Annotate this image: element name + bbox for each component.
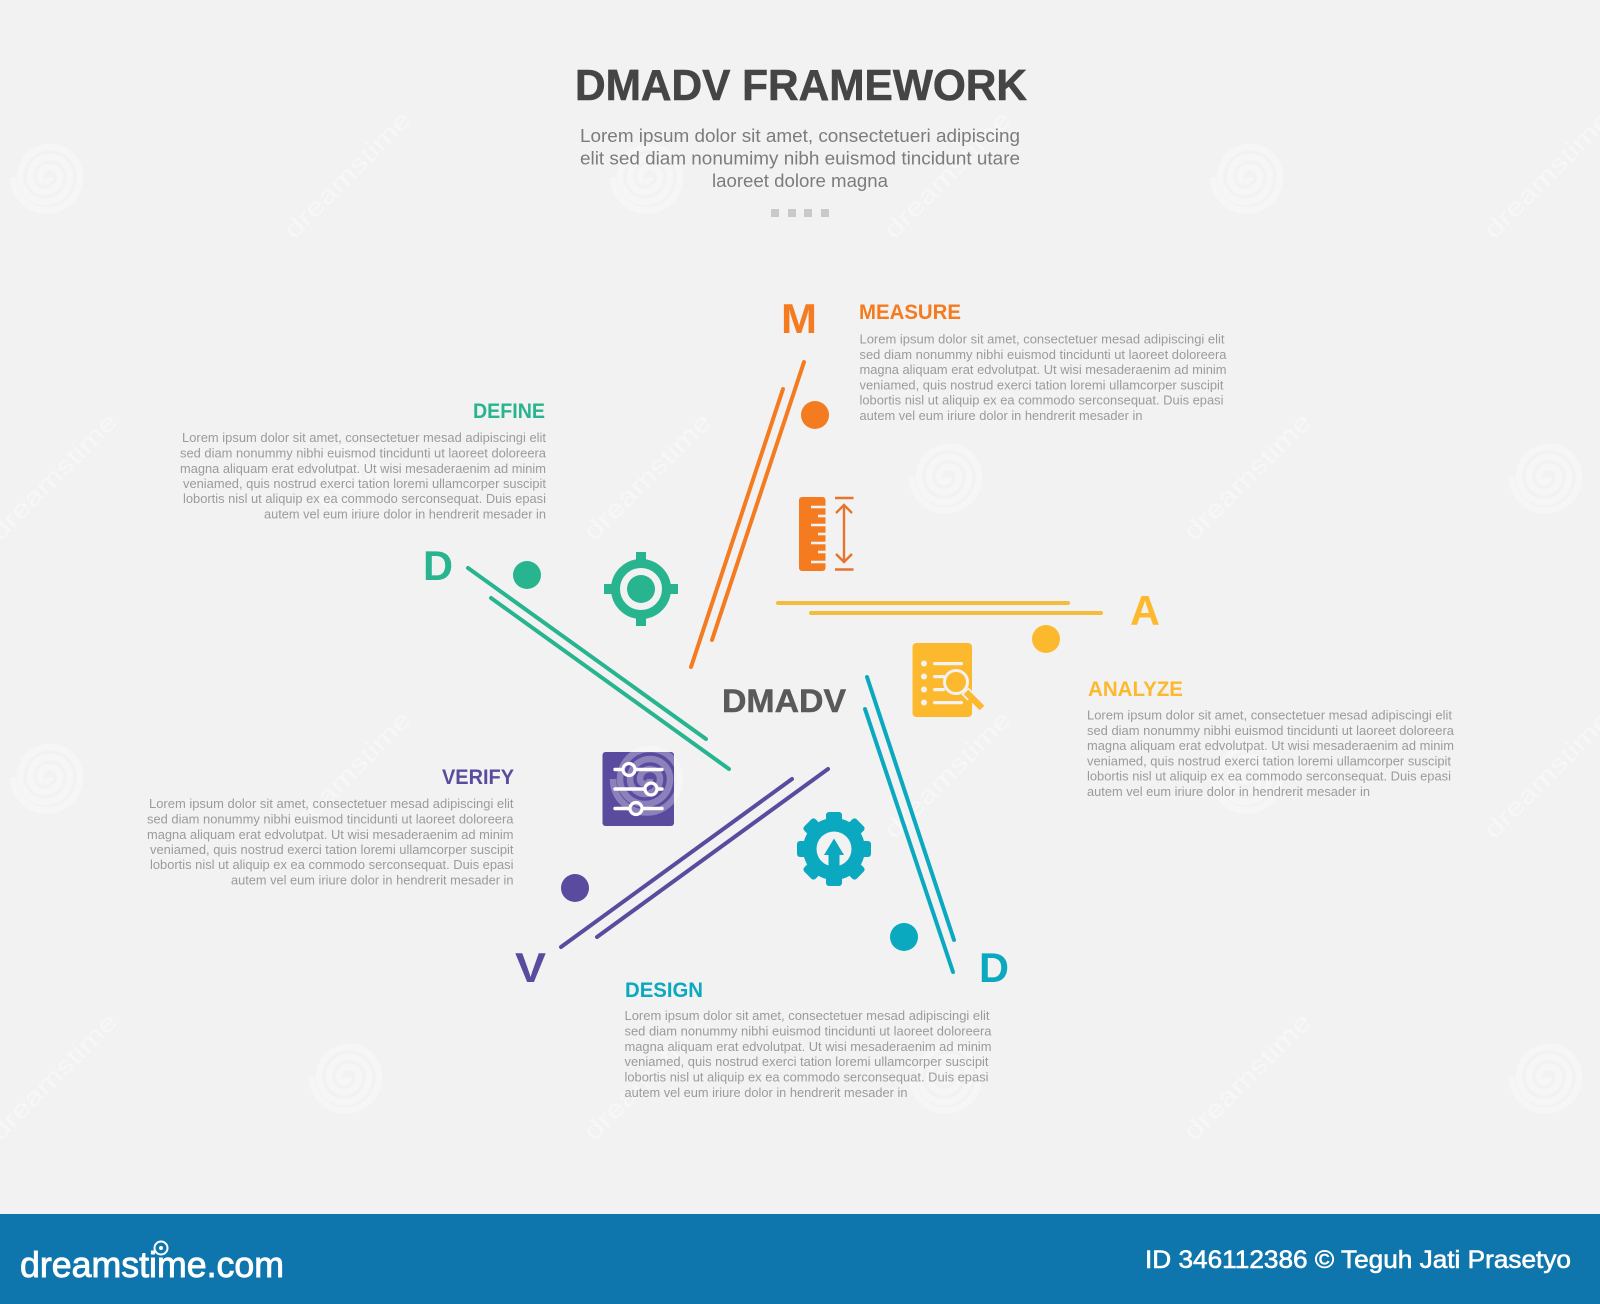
measure dot (801, 401, 829, 429)
design lines (865, 677, 954, 972)
design body text: sed diam nonummy nibhi euismod tincidunti ut laoreet doloreera (624, 1024, 992, 1038)
footer credit: ID 346112386 © Teguh Jati Prasetyo (1145, 1246, 1571, 1274)
design body text: veniamed, quis nostrud exerci tation loremi ullamcorper suscipit (624, 1054, 989, 1069)
subtitle: Lorem ipsum dolor sit amet, consectetueri adipiscing (580, 125, 1020, 146)
define body text: lobortis nisl ut aliquip ex ea commodo serconsequat. Duis epasi (183, 491, 546, 506)
footer bar (0, 1214, 1600, 1304)
text: dreamstime (1178, 1008, 1317, 1146)
footer logo: dreamstime.com (20, 1244, 284, 1285)
define heading: DEFINE (473, 400, 545, 423)
step: define (180, 400, 729, 769)
measure letter: M (781, 295, 817, 342)
measure body text: autem vel eum iriure dolor in hendrerit mesader in (860, 408, 1142, 423)
verify body text: lobortis nisl ut aliquip ex ea commodo serconsequat. Duis epasi (150, 857, 514, 872)
step: analyze (778, 587, 1455, 799)
verify heading: VERIFY (442, 766, 514, 789)
define body text: sed diam nonummy nibhi euismod tincidunti ut laoreet doloreera (180, 446, 547, 460)
verify body text: veniamed, quis nostrud exerci tation loremi ullamcorper suscipit (150, 842, 514, 857)
verify body text (147, 796, 514, 888)
analyze letter: A (1130, 587, 1160, 634)
title: DMADV FRAMEWORK (575, 61, 1027, 110)
define lines (468, 568, 729, 769)
verify dot (561, 874, 589, 902)
text: dreamstime (1478, 106, 1600, 244)
subtitle: elit sed diam nonumimy nibh euismod tincidunt utare (580, 148, 1020, 168)
analyze body text (1087, 708, 1455, 799)
verify body text: autem vel eum iriure dolor in hendrerit mesader in (231, 872, 514, 888)
design letter: D (979, 944, 1009, 991)
text: dreamstime (578, 408, 717, 546)
icon: sliders (602, 749, 680, 826)
analyze dot (1032, 625, 1060, 653)
subtitle: laoreet dolore magna (712, 170, 889, 191)
define body text: veniamed, quis nostrud exerci tation loremi ullamcorper suscipit (183, 476, 546, 491)
measure body text: magna aliquam erat edvolutpat. Ut wisi mesaderaenim ad minim (860, 362, 1226, 377)
verify body text: Lorem ipsum dolor sit amet, consectetuer mesad adipiscingi elit (149, 796, 514, 811)
text: dreamstime (1478, 706, 1600, 844)
text: dreamstime (878, 706, 1017, 844)
icon: document with magnifier (912, 643, 982, 717)
define body text: autem vel eum iriure dolor in hendrerit mesader in (264, 506, 546, 522)
define letter: D (423, 542, 453, 589)
define body text: Lorem ipsum dolor sit amet, consectetuer mesad adipiscingi elit (182, 430, 546, 445)
analyze body text: magna aliquam erat edvolutpat. Ut wisi mesaderaenim ad minim (1087, 738, 1454, 753)
analyze heading: ANALYZE (1088, 678, 1183, 701)
text: dreamstime (578, 1008, 717, 1146)
text: dreamstime (278, 106, 417, 244)
text: dreamstime (878, 106, 1017, 244)
analyze lines (778, 603, 1101, 613)
define dot (513, 561, 541, 589)
design heading: DESIGN (625, 979, 703, 1002)
measure lines (691, 362, 804, 667)
design body text: magna aliquam erat edvolutpat. Ut wisi mesaderaenim ad minim (624, 1039, 992, 1054)
analyze body text: Lorem ipsum dolor sit amet, consectetuer mesad adipiscingi elit (1087, 708, 1452, 722)
text: dreamstime (278, 706, 417, 844)
subtitle (580, 125, 1020, 191)
step: verify (147, 749, 828, 991)
verify lines (561, 769, 828, 947)
analyze body text: lobortis nisl ut aliquip ex ea commodo serconsequat. Duis epasi (1087, 768, 1451, 784)
measure body text (860, 332, 1227, 423)
verify body text: sed diam nonummy nibhi euismod tincidunti ut laoreet doloreera (147, 812, 514, 826)
verify body text: magna aliquam erat edvolutpat. Ut wisi mesaderaenim ad minim (147, 827, 514, 842)
icon: gear with up arrow (797, 812, 871, 886)
text: dreamstime (1178, 408, 1317, 546)
measure body text: veniamed, quis nostrud exerci tation loremi ullamcorper suscipit (860, 378, 1224, 392)
analyze body text: sed diam nonummy nibhi euismod tincidunti ut laoreet doloreera (1087, 723, 1455, 738)
design dot (890, 923, 918, 951)
design body text: lobortis nisl ut aliquip ex ea commodo serconsequat. Duis epasi (624, 1070, 989, 1084)
measure body text: Lorem ipsum dolor sit amet, consectetuer mesad adipiscingi elit (860, 332, 1225, 346)
design body text: autem vel eum iriure dolor in hendrerit mesader in (624, 1085, 908, 1100)
analyze body text: veniamed, quis nostrud exerci tation loremi ullamcorper suscipit (1087, 754, 1451, 768)
center label: DMADV (722, 683, 847, 719)
title divider dots (771, 209, 829, 217)
design body text: Lorem ipsum dolor sit amet, consectetuer mesad adipiscingi elit (624, 1008, 990, 1023)
step: measure (691, 295, 1227, 667)
icon: ruler and height arrow (799, 497, 854, 571)
design body text (624, 1008, 992, 1100)
verify letter: V (515, 944, 546, 991)
measure body text: lobortis nisl ut aliquip ex ea commodo serconsequat. Duis epasi (860, 392, 1224, 408)
step: design (624, 677, 1009, 1100)
measure body text: sed diam nonummy nibhi euismod tincidunti ut laoreet doloreera (860, 347, 1227, 362)
define body text: magna aliquam erat edvolutpat. Ut wisi mesaderaenim ad minim (180, 461, 546, 476)
analyze body text: autem vel eum iriure dolor in hendrerit mesader in (1087, 784, 1370, 799)
define body text (180, 430, 547, 522)
icon: target (604, 552, 678, 626)
measure heading: MEASURE (859, 301, 961, 324)
